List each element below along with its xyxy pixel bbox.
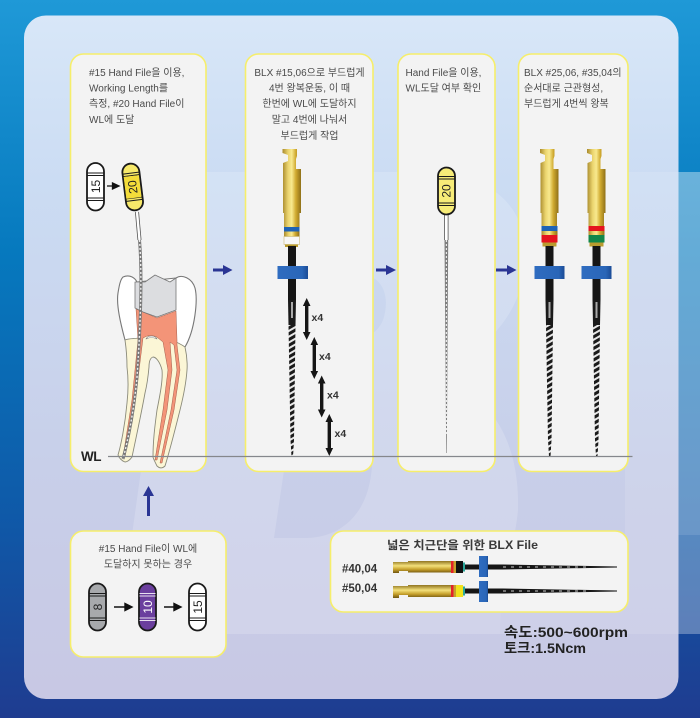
label: 50.04: #50,04 (342, 583, 378, 595)
arrow: step 1 to step 2 (213, 265, 232, 275)
text: step 1 description: 측정, #20 Hand File이 (89, 98, 184, 110)
icon: file 40.04 (393, 556, 617, 577)
text: step 2 description: BLX #15,06으로 부드럽게 (254, 67, 365, 79)
arrow: movement 1 (303, 298, 310, 340)
icon: hand file 15: 15 (191, 600, 205, 614)
panel: step 1 measure working length (70, 54, 206, 472)
arrow: movement 4 (326, 414, 333, 456)
text: step 2 description: 한번에 WL에 도달하지 (262, 97, 357, 110)
text: step 4 description: 부드럽게 4번씩 왕복 (524, 98, 609, 110)
arrow: movement 3 (318, 376, 326, 418)
arrow: 15 to 20 (107, 183, 119, 189)
arrow: fallback up to step 1 (143, 486, 154, 516)
text: step 1 description: #15 Hand File을 이용, (89, 67, 184, 79)
working length line (108, 456, 632, 458)
icon: hand file 20 checking WL (438, 168, 455, 453)
icon: hand file 15 (87, 163, 104, 210)
text: fallback description: #15 Hand File이 WL에 (99, 543, 197, 555)
text: speed: 속도:500~600rpm (504, 624, 628, 640)
icon: up-down movement arrows with x4 labels (303, 298, 346, 456)
label: x4 fourth: x4 (334, 428, 346, 440)
text: step 3 description: WL도달 여부 확인 (406, 82, 481, 94)
text: step 3 description: Hand File을 이용, (406, 67, 481, 79)
text: step 1 description: WL에 도달 (89, 114, 134, 126)
panel: step 4 BLX 25.06 and 35.04 (518, 54, 628, 472)
icon: hand file 8: 8 (91, 603, 105, 610)
icon: hand file 10: 10 (141, 600, 155, 614)
text: speed and torque (504, 624, 628, 656)
icon: BLX file 35.04 (582, 149, 612, 456)
icon: file 50.04 (393, 581, 617, 602)
icon: hand file 20 in canal (121, 163, 144, 459)
heading: wide apex files: 넓은 치근단을 위한 BLX File (387, 538, 538, 552)
label: x4 third: x4 (327, 390, 339, 402)
panel: step 3 confirm WL (398, 54, 495, 472)
panel: when 15 hand file does not reach WL (70, 531, 226, 657)
label: 40.04: #40,04 (342, 564, 378, 576)
text: torque: 토크:1.5Ncm (504, 640, 586, 656)
text: step 2 description: 말고 4번에 나눠서 (272, 114, 347, 126)
label: x4 second: x4 (319, 351, 331, 363)
text: step 4 description: BLX #25,06, #35,04의 (524, 67, 622, 79)
arrow: movement 2 (310, 337, 318, 379)
icon: BLX file 15.06 (278, 149, 308, 456)
text: step 4 description: 순서대로 근관형성, (524, 82, 603, 94)
panel: BLX files for wide apex (330, 531, 628, 612)
arrow: 8 to 10 (114, 604, 132, 610)
label: x4 first: x4 (312, 312, 323, 324)
icon: hand file 15 (189, 584, 206, 630)
arrow: step 3 to step 4 (496, 265, 516, 275)
icon: tooth cross-section (118, 275, 196, 468)
icon: hand file 20 checking WL: 20 (440, 184, 454, 198)
icon: hand file 8 (89, 584, 106, 630)
icon: hand file 20 in canal: 20 (125, 179, 141, 194)
arrow: 10 to 15 (164, 604, 181, 610)
icon: hand file 10 (139, 584, 156, 630)
panel: step 2 BLX 15.06 (246, 54, 373, 472)
label: WL: WL (81, 449, 101, 464)
icon: BLX file 25.06 (534, 149, 564, 456)
text: fallback description: 도달하지 못하는 경우 (104, 558, 192, 570)
icon: hand file 15: 15 (89, 180, 103, 193)
text: step 2 description: 부드럽게 작업 (281, 129, 338, 142)
arrow: step 2 to step 3 (376, 265, 396, 275)
text: step 1 description: Working Length를 (89, 82, 168, 94)
text: step 2 description: 4번 왕복운동, 이 때 (269, 82, 350, 94)
